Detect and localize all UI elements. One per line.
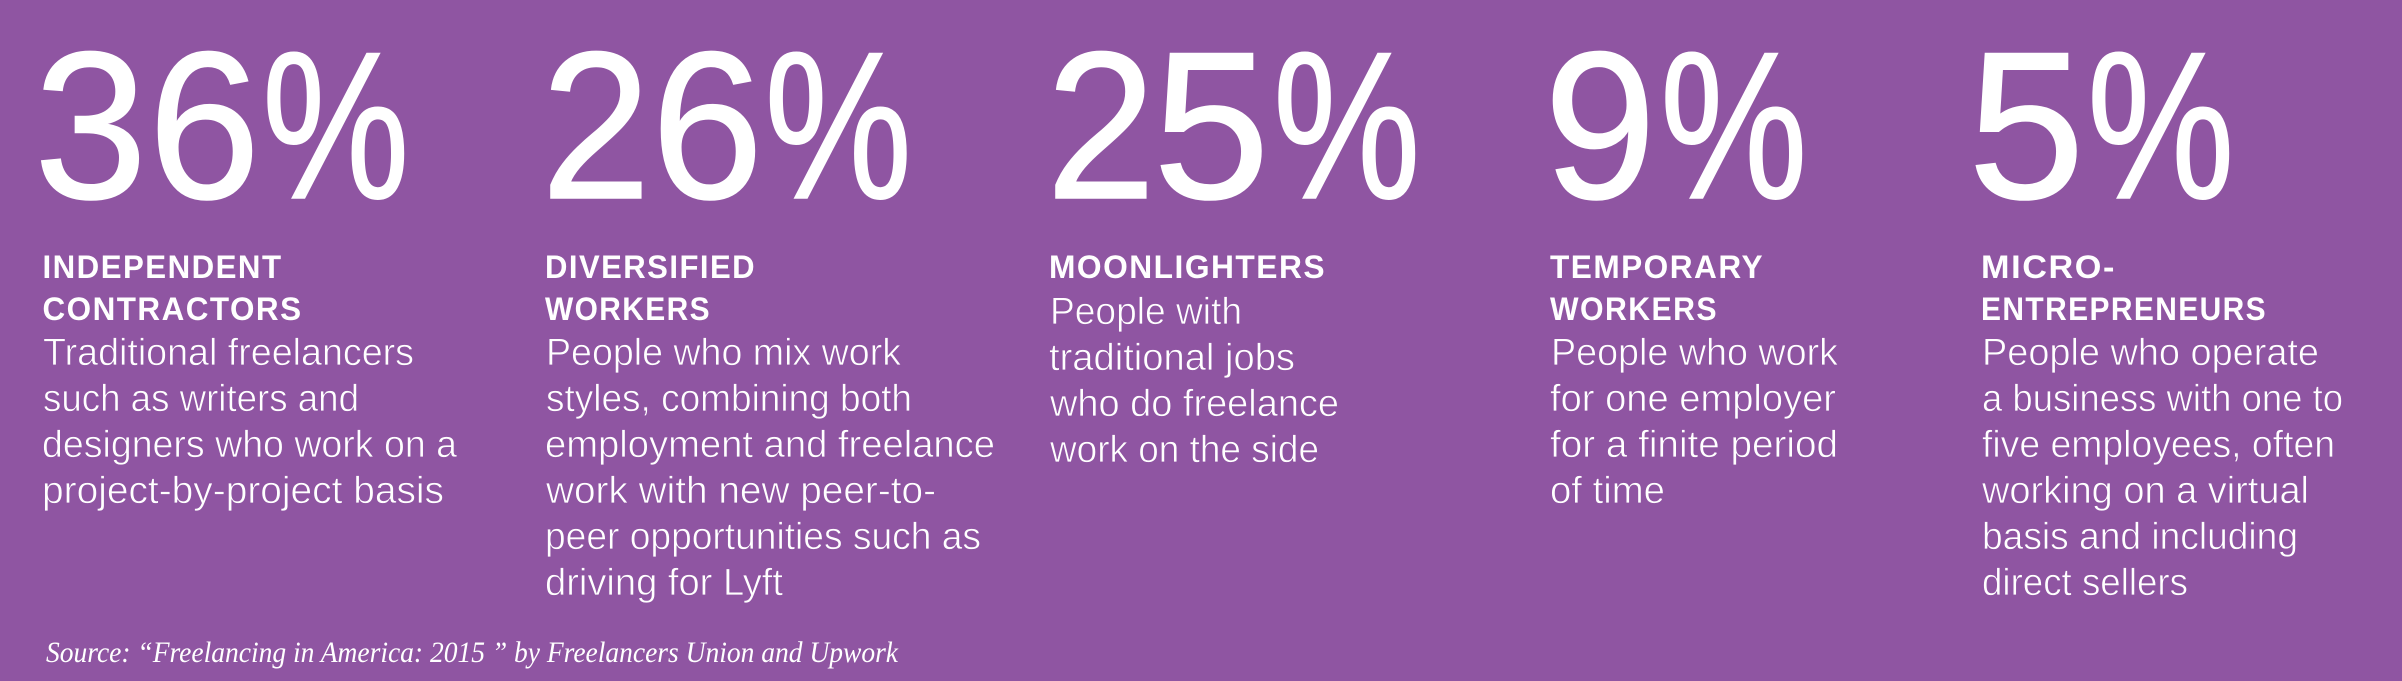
stat: 26%: % (764, 9, 912, 243)
description: independent contractors: project-by-project basis (42, 470, 444, 512)
description: diversified workers: peer opportunities such as (545, 516, 981, 558)
heading: micro-entrepreneurs: ENTREPRENEURS (1981, 291, 2267, 327)
heading: diversified workers (545, 249, 756, 327)
description: diversified workers (545, 332, 995, 604)
description: independent contractors: designers who work on a (42, 424, 458, 466)
heading: temporary workers (1550, 249, 1764, 327)
description: temporary workers: of time (1550, 470, 1665, 512)
description: micro-entrepreneurs: five employees, often (1982, 424, 2335, 466)
heading: moonlighters: MOONLIGHTERS (1049, 249, 1326, 285)
stat: 36%: 3 (34, 8, 147, 243)
stat: 5%: % (2087, 9, 2234, 243)
description: diversified workers: work with new peer-to- (545, 470, 936, 512)
heading: diversified workers: WORKERS (545, 291, 711, 327)
description: independent contractors (42, 332, 458, 512)
stat: 9%: 9 (1544, 8, 1656, 243)
panel: diversified workers (541, 8, 995, 604)
stat: 26% (541, 8, 912, 243)
description: independent contractors: such as writers and (43, 378, 359, 420)
description: moonlighters: work on the side (1049, 429, 1319, 471)
stat: 26%: 2 (541, 9, 651, 243)
stat: 36%: % (262, 9, 409, 243)
description: micro-entrepreneurs: People who operate (1982, 332, 2319, 374)
panel: independent contractors (34, 8, 458, 512)
heading: micro-entrepreneurs (1981, 249, 2267, 327)
heading: independent contractors: CONTRACTORS (42, 291, 302, 327)
description: moonlighters (1049, 291, 1339, 471)
description: temporary workers: for a finite period (1550, 424, 1838, 466)
panel: moonlighters (1046, 8, 1420, 471)
description: micro-entrepreneurs: working on a virtual (1981, 470, 2309, 512)
stat: 25%: 5 (1153, 8, 1270, 243)
heading: diversified workers: DIVERSIFIED (545, 249, 756, 285)
heading: independent contractors (42, 249, 302, 327)
heading: micro-entrepreneurs: MICRO- (1981, 249, 2116, 285)
description: moonlighters: People with (1050, 291, 1242, 333)
description: micro-entrepreneurs: direct sellers (1982, 562, 2188, 604)
panel: micro-entrepreneurs (1968, 8, 2343, 604)
heading: temporary workers: WORKERS (1550, 291, 1718, 327)
description: diversified workers: employment and freelance (545, 424, 995, 466)
stat: 36% (34, 8, 409, 243)
stat: 5%: 5 (1968, 8, 2085, 243)
description: diversified workers: driving for Lyft (545, 562, 783, 604)
stat: 5% (1968, 8, 2234, 243)
stat: 25%: 2 (1046, 9, 1156, 243)
stat: 25%: % (1273, 9, 1420, 243)
stat: 9% (1544, 8, 1807, 243)
description: micro-entrepreneurs: a business with one to (1982, 378, 2343, 420)
description: temporary workers: People who work (1551, 332, 1839, 374)
description: independent contractors: Traditional freelancers (43, 332, 414, 374)
stat: 25% (1046, 8, 1420, 243)
source note: Source: “Freelancing in America: 2015 ” by Freelancers Union and Upwork (46, 636, 899, 669)
description: micro-entrepreneurs (1981, 332, 2343, 604)
description: moonlighters: who do freelance (1049, 383, 1339, 425)
stat: 36%: 6 (148, 8, 260, 243)
description: micro-entrepreneurs: basis and including (1982, 516, 2298, 558)
panel: temporary workers (1544, 8, 1839, 512)
heading: independent contractors: INDEPENDENT (42, 249, 282, 285)
description: diversified workers: styles, combining both (546, 378, 912, 420)
description: diversified workers: People who mix work (546, 332, 902, 374)
heading: temporary workers: TEMPORARY (1550, 249, 1764, 285)
stat: 26%: 6 (651, 8, 763, 243)
description: temporary workers: for one employer (1550, 378, 1836, 420)
description: temporary workers (1550, 332, 1839, 512)
stat: 9%: % (1660, 9, 1807, 243)
description: moonlighters: traditional jobs (1049, 337, 1295, 379)
